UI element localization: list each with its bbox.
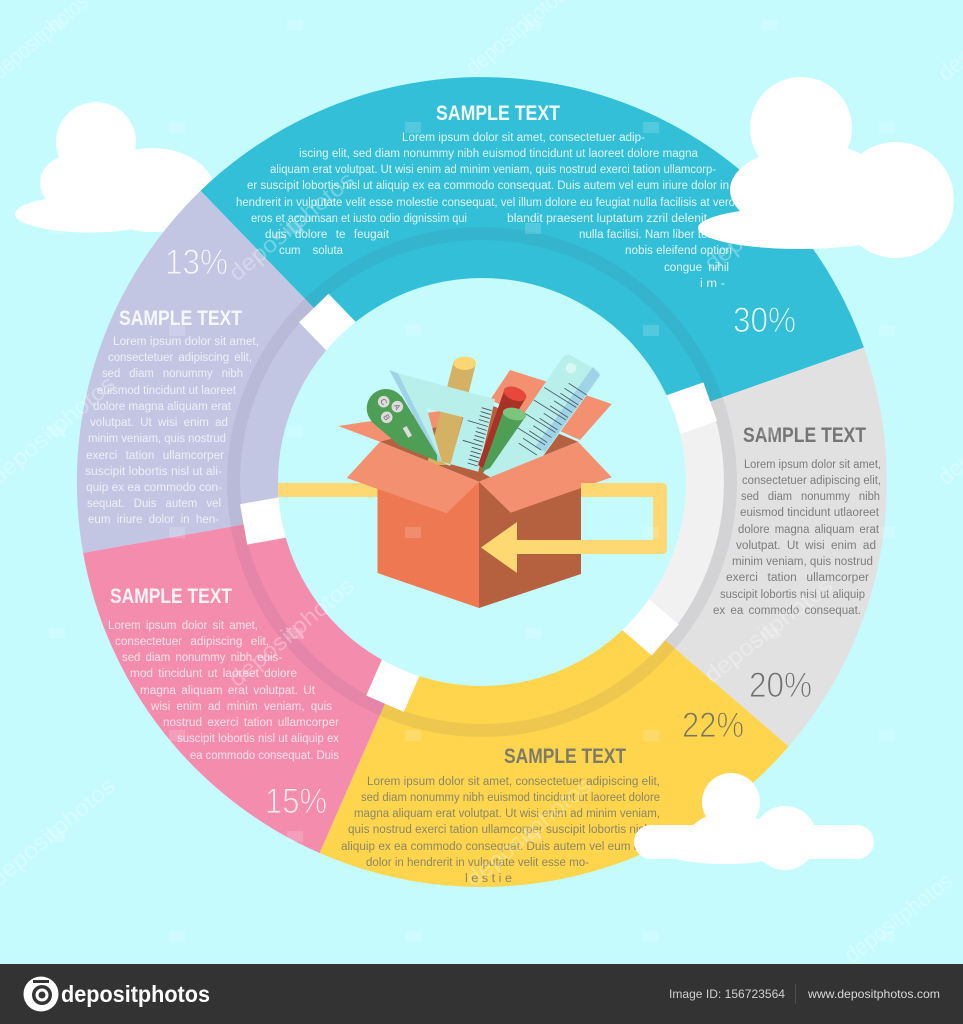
panel: 20% gray segment bbox=[482, 348, 887, 746]
set square bbox=[389, 370, 495, 472]
icon: footer logo bbox=[24, 976, 58, 1012]
watermark: diagonal text: depositphotos bbox=[224, 166, 359, 286]
text block: yellow panel: quis nostrud exerci tation ullamcorper suscipit lobortis nisl ut bbox=[348, 824, 661, 836]
watermark: diagonal text: depositphotos bbox=[461, 772, 596, 892]
text block: cyan panel: hendrerit in vulputate velit esse molestie consequat, vel illum dolore eu feugiat nulla facilisis at vero bbox=[236, 197, 735, 209]
percentage: 15%: 15% bbox=[265, 782, 327, 821]
watermark: diagonal text: depositphotos bbox=[224, 572, 359, 692]
tan pencil bbox=[427, 357, 476, 465]
box interior bbox=[380, 400, 578, 482]
text block: yellow panel: sed diam nonummy nibh euismod tincidunt ut laoreet dolore bbox=[361, 792, 660, 804]
watermark: diagonal text: depositphotos bbox=[699, 160, 837, 276]
watermark: diagonal text: depositphotos bbox=[699, 572, 837, 688]
text block: cyan panel bbox=[236, 132, 735, 290]
text block: lavender panel: Lorem ipsum dolor sit amet, bbox=[113, 336, 259, 348]
text block: pink panel: suscipit lobortis nisl ut aliquip ex bbox=[177, 733, 339, 745]
box right face bbox=[479, 482, 581, 608]
footer brand name: depositphotos bbox=[61, 981, 210, 1007]
text block: lavender panel: quip ex ea commodo con- bbox=[86, 482, 222, 494]
cloud: top right bbox=[698, 77, 954, 258]
text block: lavender panel: eum iriure dolor in hen- bbox=[88, 514, 219, 526]
text block: lavender panel: volutpat. Ut wisi enim ad bbox=[90, 417, 228, 429]
text block: lavender panel: euismod tincidunt ut laoreet bbox=[97, 385, 237, 397]
text block: lavender panel: minim veniam, quis nostrud bbox=[88, 433, 226, 445]
text block: pink panel: magna aliquam erat volutpat. Ut bbox=[140, 685, 316, 697]
icon: open box with school supplies bbox=[338, 355, 612, 608]
text block: pink panel: Lorem ipsum dolor sit amet, bbox=[108, 620, 258, 632]
ring band bbox=[234, 234, 730, 730]
text block: pink panel: nostrud exerci tation ullamcorper bbox=[163, 717, 339, 729]
heading: lavender panel: SAMPLE TEXT bbox=[119, 307, 242, 330]
text block: cyan panel: aliquam erat volutpat. Ut wisi enim ad minim veniam, quis nostrud exerci tation ullamcorp- bbox=[270, 164, 716, 176]
text block: gray panel: Lorem ipsum dolor sit amet, bbox=[744, 459, 881, 471]
text block: pink panel: consectetuer adipiscing elit, bbox=[115, 636, 269, 648]
footer bar bbox=[0, 964, 963, 1024]
text block: cyan panel: i m - bbox=[700, 278, 725, 290]
red pencil bbox=[478, 384, 528, 468]
box back-right flap bbox=[490, 370, 612, 440]
white separators between segments bbox=[244, 308, 710, 704]
watermark: camera icons bbox=[49, 20, 895, 942]
text block: lavender panel: sequat. Duis autem vel bbox=[87, 498, 221, 510]
ruler bbox=[483, 355, 600, 493]
text block: gray panel: exerci tation ullamcorper bbox=[726, 572, 869, 584]
text block: yellow panel: aliquip ex ea commodo consequat. Duis autem vel eum iriure bbox=[341, 841, 660, 853]
arrow: yellow looping arrow into box bbox=[481, 483, 667, 573]
box front-right flap bbox=[479, 442, 612, 513]
arrow: left bar behind box bbox=[278, 483, 388, 497]
box front-left flap bbox=[347, 442, 479, 513]
panel: 15% pink segment bbox=[83, 482, 482, 853]
text block: lavender panel bbox=[85, 336, 259, 526]
text block: cyan panel: congue nihil bbox=[664, 262, 729, 274]
text block: yellow panel: Lorem ipsum dolor sit amet, consectetuer adipiscing elit, bbox=[367, 776, 660, 788]
text block: gray panel bbox=[713, 459, 881, 617]
text block: cyan panel: Lorem ipsum dolor sit amet, consectetuer adip- bbox=[402, 132, 645, 144]
green pencil bbox=[482, 406, 527, 472]
text block: cyan panel: iscing elit, sed diam nonummy nibh euismod tincidunt ut laoreet dolore magna bbox=[299, 148, 699, 160]
text block: gray panel: minim veniam, quis nostrud bbox=[732, 556, 873, 568]
text block: gray panel: sed diam nonummy nibh bbox=[741, 491, 880, 503]
text block: lavender panel: sed diam nonummy nibh bbox=[102, 368, 243, 380]
footer image id: Image ID: 156723564 bbox=[669, 987, 785, 1001]
text block: cyan panel: er suscipit lobortis nisl ut aliquip ex ea commodo consequat. Duis autem vel eum iriure dolor in bbox=[247, 180, 729, 192]
text block: gray panel: euismod tincidunt utlaoreet bbox=[740, 507, 880, 519]
text block: pink panel bbox=[108, 620, 339, 762]
text block: cyan panel: nobis eleifend option bbox=[625, 245, 732, 257]
text block: gray panel: volutpat. Ut wisi enim ad bbox=[736, 540, 876, 552]
text block: pink panel: sed diam nonummy nibh euis- bbox=[122, 652, 282, 664]
box left face bbox=[378, 482, 479, 608]
cloud: top left bbox=[15, 102, 214, 232]
text block: yellow panel: magna aliquam erat volutpat. Ut wisi enim ad minim veniam, bbox=[354, 808, 660, 820]
text block: gray panel: suscipit lobortis nisl ut aliquip bbox=[720, 589, 865, 601]
text block: lavender panel: suscipit lobortis nisl ut ali- bbox=[85, 466, 222, 478]
panel: 30% cyan segment bbox=[200, 77, 864, 482]
text block: pink panel: mod tincidunt ut laoreet dolore bbox=[130, 668, 297, 680]
cloud: bottom right bbox=[634, 773, 874, 870]
text block: cyan panel: cum soluta bbox=[279, 245, 344, 257]
game controller: A bbox=[392, 402, 403, 412]
text block: yellow panel: l e s t i e bbox=[465, 873, 512, 885]
heading: yellow panel: SAMPLE TEXT bbox=[504, 745, 626, 768]
panel: 13% lavender segment bbox=[77, 191, 482, 553]
footer website: www.depositphotos.com bbox=[807, 987, 940, 1001]
percentage: 20%: 20% bbox=[749, 666, 812, 705]
percentage: 13%: 13% bbox=[165, 243, 228, 282]
heading: pink panel: SAMPLE TEXT bbox=[110, 585, 232, 608]
box back-left flap bbox=[338, 411, 445, 442]
text block: cyan panel: eros et accumsan et iusto odio dignissim qui bbox=[251, 213, 467, 225]
text block: pink panel: wisi enim ad minim veniam, quis bbox=[150, 701, 332, 713]
text block: gray panel: ex ea commodo consequat. bbox=[713, 605, 861, 617]
text block: cyan panel: nulla facilisi. Nam liber tempor bbox=[579, 229, 734, 241]
text block: cyan panel: duis dolore te feugait bbox=[265, 229, 390, 241]
text block: yellow panel bbox=[341, 776, 661, 885]
game controller bbox=[367, 389, 437, 461]
panel: 22% yellow segment bbox=[320, 482, 789, 887]
text block: gray panel: dolore magna aliquam erat bbox=[738, 524, 880, 536]
text block: lavender panel: exerci tation ullamcorper bbox=[86, 450, 224, 462]
text block: yellow panel: dolor in hendrerit in vulputate velit esse mo- bbox=[366, 857, 589, 869]
text block: pink panel: ea commodo consequat. Duis bbox=[190, 750, 339, 762]
heading: cyan panel: SAMPLE TEXT bbox=[436, 102, 560, 125]
text block: lavender panel: consectetuer adipiscing elit, bbox=[108, 352, 252, 364]
game controller: B bbox=[381, 413, 392, 422]
inner circle bbox=[278, 278, 686, 686]
percentage: 22%: 22% bbox=[682, 706, 744, 745]
heading: gray panel: SAMPLE TEXT bbox=[743, 424, 866, 447]
text block: lavender panel: dolore magna aliquam erat bbox=[93, 401, 232, 413]
text block: gray panel: consectetuer adipiscing elit, bbox=[742, 475, 881, 487]
percentage: 30%: 30% bbox=[733, 301, 796, 340]
text block: cyan panel: blandit praesent luptatum zzril delenit bbox=[507, 213, 708, 225]
game controller: C bbox=[378, 397, 389, 407]
